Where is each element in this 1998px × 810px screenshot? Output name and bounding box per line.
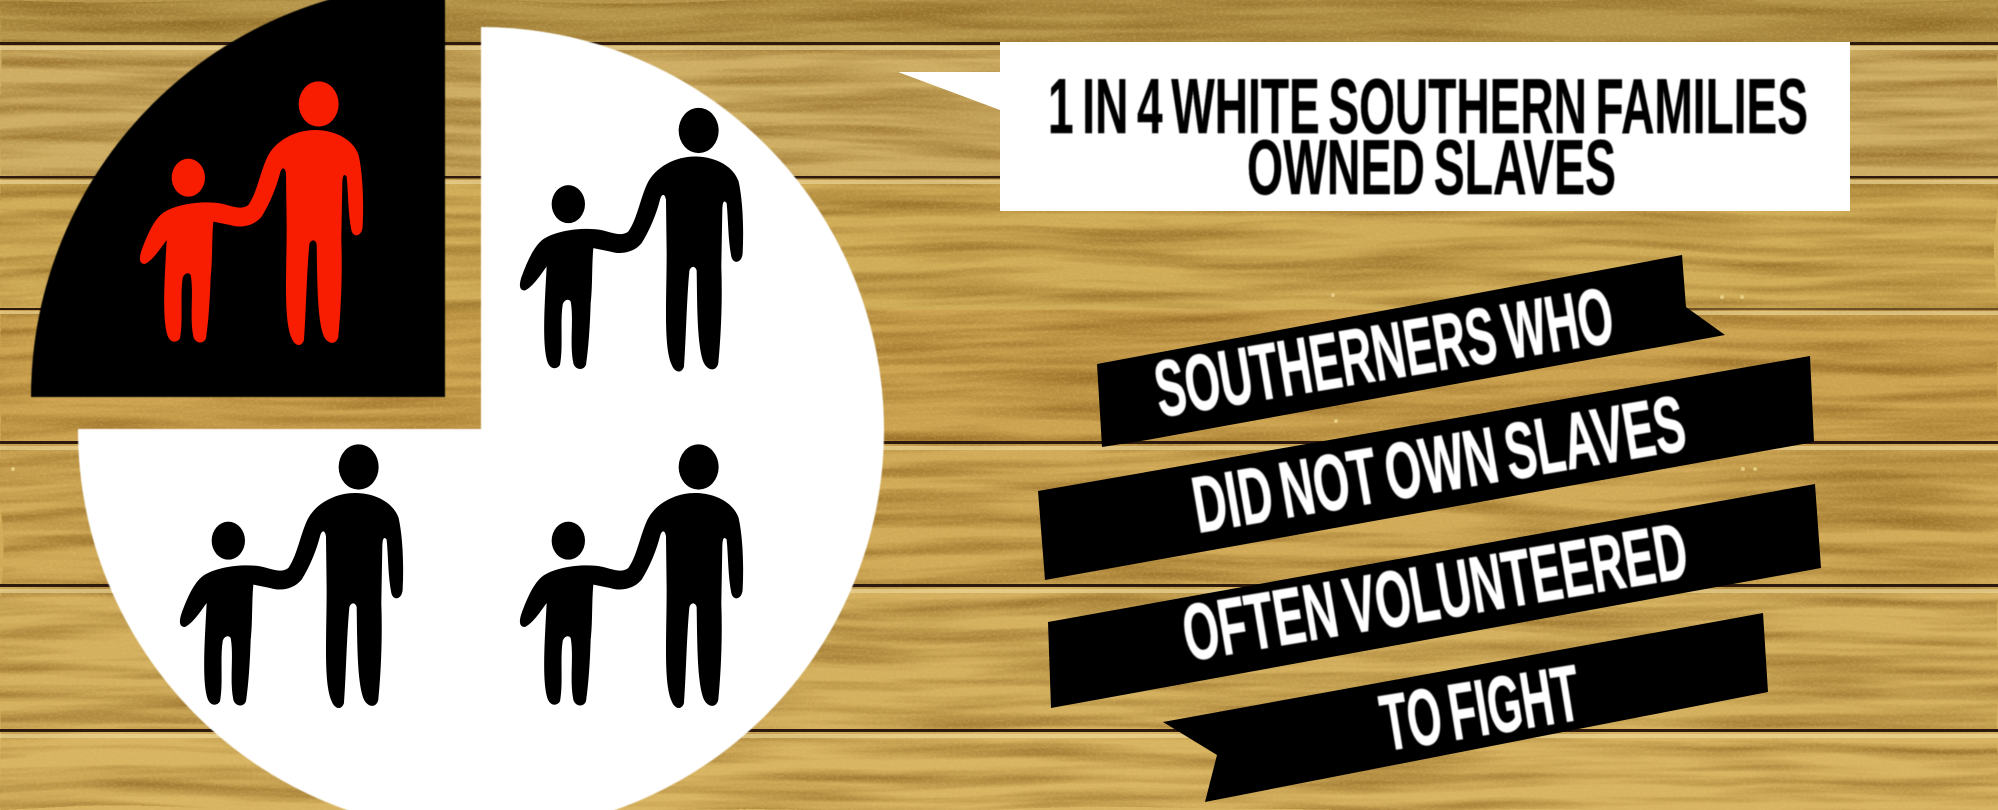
icon: black parent and child, bottom left <box>180 444 403 708</box>
callout text: OWNED SLAVES <box>1247 123 1616 211</box>
callout text <box>1048 62 1808 211</box>
ribbon 4: TO FIGHT <box>1374 648 1586 768</box>
ribbon 2 <box>1038 356 1814 580</box>
icon: red parent and child <box>140 81 363 345</box>
ribbon 1 <box>1097 255 1725 447</box>
callout: speech box with statistic <box>898 42 1850 211</box>
ribbon 3 <box>1048 484 1821 708</box>
icon: black parent and child, bottom right <box>520 444 743 708</box>
icon: black parent and child, top right <box>520 108 743 372</box>
pie chart: three white quarters for non-owning families <box>78 27 884 810</box>
ribbon 4 <box>1163 613 1768 802</box>
pie chart: black quarter for slave-owning families <box>31 0 445 397</box>
ribbon banner with text about non-slaveholders <box>1038 255 1821 802</box>
ribbon 1: SOUTHERNERS WHO <box>1148 270 1620 434</box>
